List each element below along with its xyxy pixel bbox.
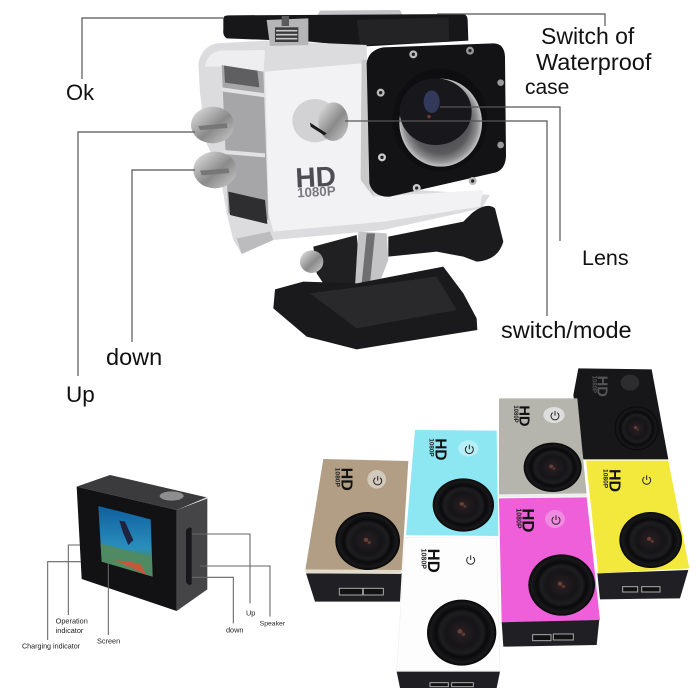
camera side [177, 498, 207, 611]
frame screws [409, 50, 417, 58]
metal screw [300, 250, 323, 273]
grey camera: HD [515, 405, 531, 427]
main action camera in waterproof case: 1080P [297, 183, 336, 200]
tan camera: 1080P [333, 468, 340, 487]
black lens frame [367, 43, 506, 197]
camera top [77, 475, 207, 510]
label: switch of waterproof case: case [525, 76, 569, 99]
yellow camera [586, 461, 689, 599]
label: switch/mode: switch/mode [501, 317, 632, 343]
thread knob on top [267, 18, 308, 46]
mount bracket [313, 235, 362, 293]
camera back [77, 487, 177, 611]
black camera [573, 368, 668, 459]
rear labels: Up [246, 609, 255, 618]
switch button [292, 99, 338, 142]
label: switch of waterproof case: Switch of [541, 23, 635, 49]
label: down: down [106, 344, 162, 370]
main action camera in waterproof case [191, 10, 506, 349]
tan camera: HD [337, 468, 354, 491]
white camera: HD [424, 549, 443, 573]
left grey band [222, 65, 268, 220]
black camera: HD [593, 376, 609, 397]
tan camera [305, 459, 408, 602]
lens [393, 68, 487, 172]
white camera [397, 537, 500, 688]
rear labels: Operation [56, 617, 88, 626]
hand screw [388, 206, 503, 262]
group of coloured cameras [305, 368, 689, 688]
white camera: 1080P [420, 549, 427, 569]
yellow camera: 1080P [601, 469, 608, 489]
side buttons [186, 528, 192, 585]
label: switch of waterproof case: Waterproof [536, 49, 652, 75]
rear view camera diagram [22, 475, 286, 650]
label: Ok: Ok [66, 80, 95, 105]
label: switch of waterproof case [525, 23, 652, 99]
top clip [223, 14, 468, 47]
white front panel [265, 63, 483, 232]
grey camera: 1080P [512, 405, 518, 423]
top shutter button [160, 491, 184, 501]
label: Up: Up [66, 382, 95, 407]
base plate [273, 267, 477, 349]
callout lines: main camera [78, 14, 605, 376]
rear labels [22, 609, 286, 650]
cyan camera [406, 430, 498, 536]
rear labels: Speaker [260, 620, 286, 627]
rear labels: Charging indicator [22, 642, 81, 650]
rear labels: down [226, 625, 244, 634]
cyan camera: HD [431, 438, 448, 460]
clear housing [198, 41, 490, 254]
callouts [48, 534, 270, 640]
black camera: 1080P [591, 376, 597, 393]
HD logo: HD [295, 161, 337, 194]
cyan camera: 1080P [427, 438, 434, 457]
LCD screen with diver [98, 506, 153, 577]
pink camera: HD [519, 508, 538, 532]
pink camera: 1080P [515, 508, 522, 529]
grey camera [499, 398, 587, 497]
rear labels: Screen [97, 636, 120, 645]
yellow camera: HD [605, 469, 622, 492]
rear labels: indicator [56, 626, 84, 635]
pink camera [499, 497, 600, 647]
side buttons [191, 107, 234, 143]
label: lens: Lens [582, 246, 629, 270]
clear housing top [317, 10, 403, 17]
